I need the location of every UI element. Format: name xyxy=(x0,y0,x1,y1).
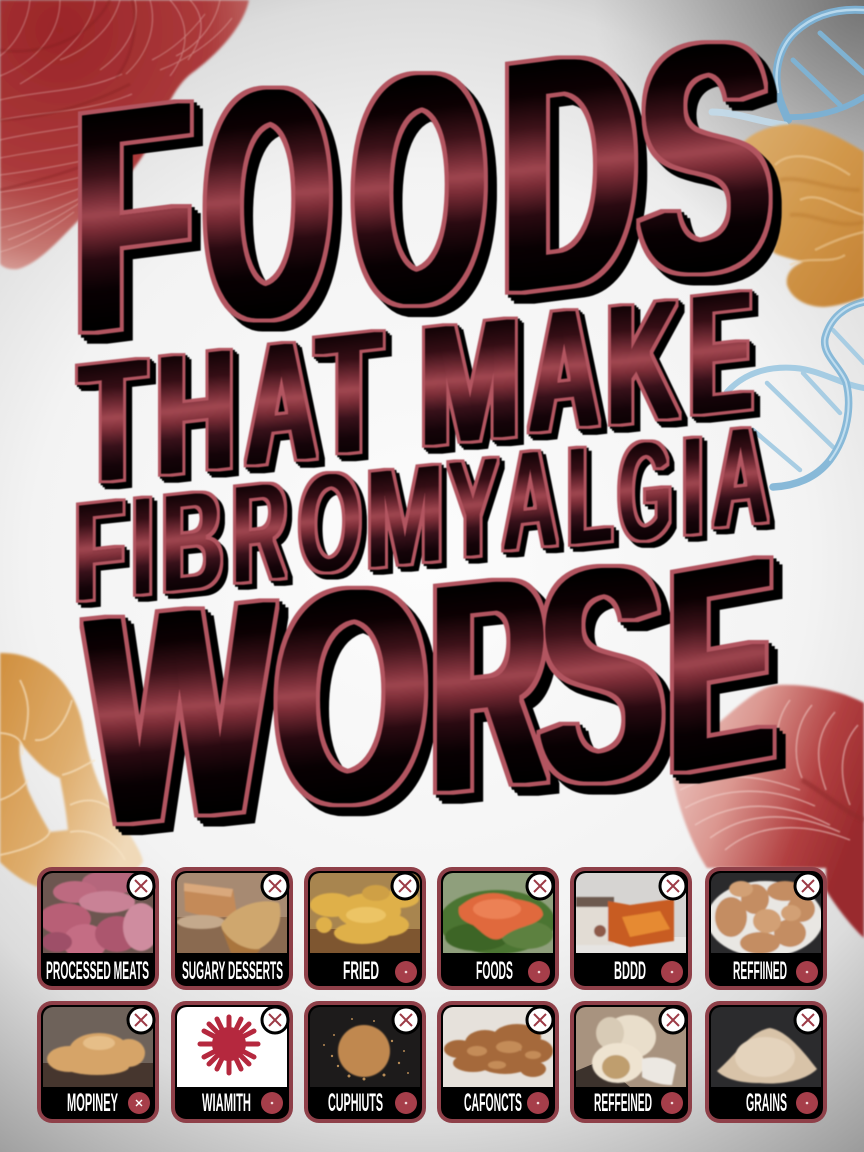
image: white pastry xyxy=(576,1007,686,1087)
title word: FOODS: F xyxy=(74,30,192,405)
title word: FIBROMYALGIA: L xyxy=(567,414,612,578)
title word: FOODS: O xyxy=(352,0,486,382)
card: cuphiuts xyxy=(304,1001,426,1123)
title xyxy=(74,0,774,894)
title words: THAT MAKE xyxy=(80,251,752,523)
card: processed meats xyxy=(37,867,159,990)
title word: WORSE: R xyxy=(431,508,547,860)
card: refined xyxy=(705,867,827,990)
card: cafoncts: CAFONCTS xyxy=(464,1089,522,1117)
icon: x badge xyxy=(262,1007,288,1033)
icon: red dot with cross xyxy=(128,1092,150,1114)
card: foods: FOODS xyxy=(476,957,513,985)
icon: red dot xyxy=(261,1092,283,1114)
title words: THAT MAKE: E xyxy=(690,251,752,454)
icon: red dot xyxy=(796,961,818,983)
title word: FOODS xyxy=(74,0,772,405)
image: jar xyxy=(576,873,686,953)
title words: THAT MAKE: M xyxy=(420,279,520,485)
DNA helix: right middle xyxy=(727,302,864,487)
food card grid: PROCESSED MEATS xyxy=(46,957,149,985)
icon: red dot xyxy=(661,961,683,983)
icon: x badge xyxy=(660,873,686,899)
title words: THAT MAKE: A xyxy=(246,301,317,505)
image: brown clusters xyxy=(443,1007,553,1087)
title word: WORSE: W xyxy=(87,532,274,894)
card: foods xyxy=(437,867,559,990)
yellow intestine: lower left xyxy=(0,653,143,891)
card: fried: FRIED xyxy=(343,957,379,985)
image: foods xyxy=(439,873,555,954)
card: grains: GRAINS xyxy=(746,1089,787,1117)
card: reffeined: REFFEINED xyxy=(594,1089,652,1117)
icon: x badge xyxy=(527,873,553,899)
card: mopiney: MOPINEY xyxy=(67,1089,118,1117)
card: sugary desserts xyxy=(171,867,293,990)
title words: THAT MAKE: T xyxy=(80,319,145,523)
card: bddd: BDDD xyxy=(614,957,646,985)
red intestine: lower right xyxy=(673,685,864,938)
icon: x badge xyxy=(392,873,418,899)
title word: FIBROMYALGIA xyxy=(75,393,769,633)
title word: FIBROMYALGIA: A xyxy=(502,418,558,583)
food card grid: SUGARY DESSERTS xyxy=(182,957,283,985)
title word: FIBROMYALGIA: M xyxy=(366,432,444,600)
image: grain pile xyxy=(711,1007,821,1087)
orange intestine: right xyxy=(743,124,864,307)
card: cuphiuts: CUPHIUTS xyxy=(328,1089,383,1117)
card: reffeined xyxy=(570,1001,692,1123)
title word: FIBROMYALGIA: B xyxy=(161,459,223,625)
card: bddd xyxy=(570,867,692,990)
title word: FIBROMYALGIA: Y xyxy=(447,427,499,591)
icon: red dot xyxy=(796,1092,818,1114)
image: fried xyxy=(310,873,420,953)
title word: FIBROMYALGIA: I xyxy=(132,467,153,628)
title words: THAT MAKE: T xyxy=(317,292,381,495)
icon: x badge xyxy=(795,1007,821,1033)
icon: x badge xyxy=(527,1007,553,1033)
title word: FIBROMYALGIA: A xyxy=(712,393,769,560)
card: wiamith: WIAMITH xyxy=(202,1089,251,1117)
title word: WORSE xyxy=(87,491,774,894)
DNA helix: top right xyxy=(712,10,864,125)
title word: WORSE: S xyxy=(539,496,664,854)
title word: FIBROMYALGIA: R xyxy=(232,451,287,616)
title words: THAT MAKE: H xyxy=(157,309,234,514)
title word: FIBROMYALGIA: O xyxy=(298,440,361,606)
icon: x badge xyxy=(795,873,821,899)
icon: x badge xyxy=(393,1007,419,1033)
icon: red dot xyxy=(661,1092,683,1114)
image: biscuits in bowl xyxy=(707,873,823,957)
image: processed meats xyxy=(43,873,153,953)
icon: x badge xyxy=(128,1007,154,1033)
icon: x badge xyxy=(128,873,154,899)
card: wiamith xyxy=(171,1001,293,1123)
title word: FIBROMYALGIA: I xyxy=(682,407,703,568)
icon: red dot xyxy=(528,961,550,983)
title word: WORSE: E xyxy=(668,491,774,839)
title words: THAT MAKE: A xyxy=(529,269,599,472)
card: refined: REFFIINED xyxy=(733,957,787,985)
icon: red dot xyxy=(395,1092,417,1114)
title word: FIBROMYALGIA: G xyxy=(618,408,672,574)
muscle fibre: top left xyxy=(0,0,249,269)
card: cafoncts xyxy=(437,1001,559,1123)
card: fried xyxy=(304,867,426,990)
icon: red dot xyxy=(395,961,417,983)
corner shade: top right xyxy=(590,0,864,270)
icon: red dot xyxy=(527,1092,549,1114)
image: sugary desserts xyxy=(177,873,287,953)
image: grain ball xyxy=(310,1007,420,1087)
icon: x badge xyxy=(660,1007,686,1033)
icon: x badge xyxy=(262,873,288,899)
title word: WORSE: O xyxy=(274,515,428,876)
card: grains xyxy=(705,1001,827,1123)
title words: THAT MAKE: K xyxy=(607,262,680,465)
image: red virus xyxy=(177,1007,287,1087)
card: mopiney xyxy=(37,1001,159,1123)
image: puffed snack xyxy=(43,1007,153,1087)
title word: FOODS: O xyxy=(205,12,331,397)
title word: FIBROMYALGIA: F xyxy=(75,467,125,633)
food card grid xyxy=(37,867,827,1123)
